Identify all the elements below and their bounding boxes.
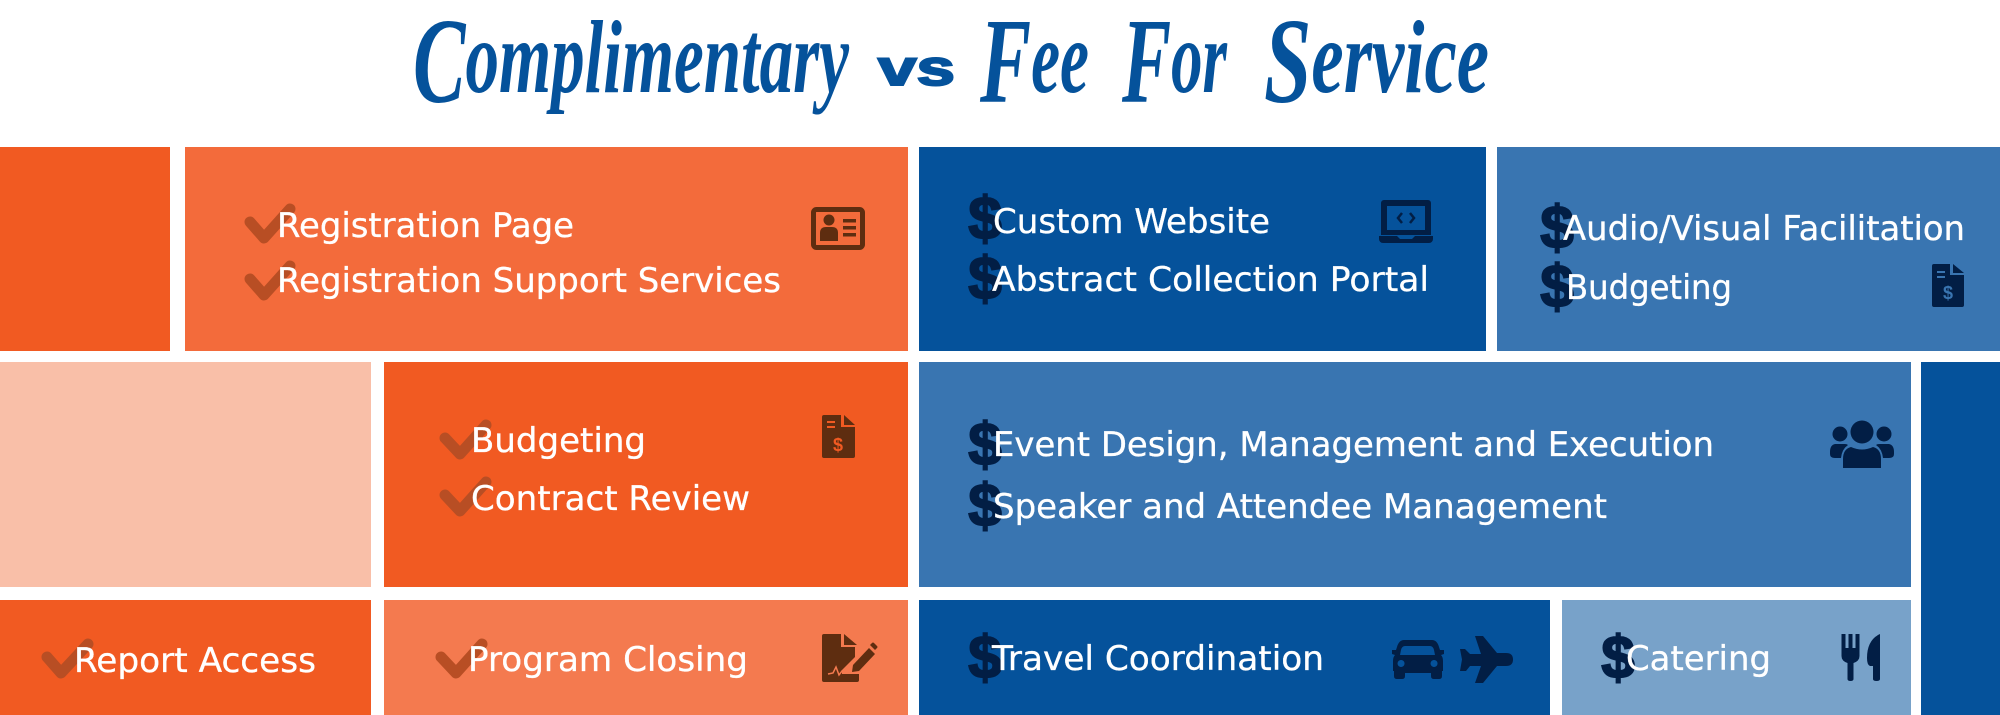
panel: travel coordination (919, 600, 1550, 715)
panel: event design (919, 362, 1911, 587)
text: registration page: Registration Page (277, 206, 574, 245)
icon: plane (1460, 636, 1513, 683)
title (413, 0, 1489, 129)
text: travel coordination: Travel Coordination (991, 639, 1324, 678)
panel: budgeting and contract review (384, 362, 908, 587)
panel: catering (1562, 600, 1911, 715)
icon: id card (814, 210, 862, 248)
text: contract review: Contract Review (471, 479, 750, 518)
icon: fork and knife (1842, 634, 1880, 681)
icon: check registration page (250, 209, 290, 238)
icon: invoice document (822, 415, 855, 458)
icon: dollar budgeting: $ (1540, 253, 1574, 320)
text: report access: Report Access (74, 641, 316, 680)
title: ervice (1311, 0, 1489, 115)
text: registration support services: Registration Support Services (277, 261, 781, 300)
icon: dollar abstract: $ (968, 245, 1002, 312)
panel: audio visual (1497, 147, 2000, 351)
text: speaker and attendee management: Speaker and Attendee Management (993, 487, 1607, 526)
text: custom website: Custom Website (993, 202, 1270, 241)
icon: dollar custom website: $ (968, 185, 1002, 252)
icon: invoice document: $ (1943, 283, 1953, 303)
text: budgeting: Budgeting (471, 421, 646, 460)
text: program closing: Program Closing (468, 640, 748, 679)
icon: check contract review (445, 482, 486, 511)
panel: tall blue block (1921, 362, 2000, 715)
icon: dollar speaker: $ (968, 472, 1002, 539)
text: catering: Catering (1626, 639, 1771, 678)
icon: check report access (47, 644, 88, 673)
icon: car (1392, 640, 1444, 679)
panel: empty pale orange block (0, 362, 371, 587)
icon: people group (1830, 420, 1894, 468)
text: abstract collection portal: Abstract Collection Portal (992, 260, 1429, 299)
icon: laptop code (1379, 200, 1433, 243)
panel: empty orange block (0, 147, 170, 351)
icon: signed document (822, 634, 878, 682)
panel: registration (185, 147, 908, 351)
title: vs (878, 40, 955, 96)
icon: check registration support (250, 266, 290, 295)
text: audio visual facilitation: Audio/Visual Facilitation (1563, 209, 1965, 248)
icon: dollar event design: $ (968, 411, 1002, 478)
panel: program closing (384, 600, 908, 715)
icon: check budgeting (445, 425, 486, 454)
title: or (1171, 0, 1228, 115)
title: ee (1031, 0, 1089, 115)
panel: report access (0, 600, 371, 715)
text: event design: Event Design, Management and Execution (993, 425, 1714, 464)
text: budgeting: Budgeting (1566, 268, 1732, 307)
icon: dollar audio visual: $ (1540, 194, 1574, 261)
icon: check program closing (441, 644, 482, 673)
icon: dollar catering: $ (1601, 624, 1635, 691)
icon: invoice document (1932, 264, 1964, 307)
icon: invoice document: $ (833, 435, 843, 455)
panel: custom website (919, 147, 1486, 351)
icon: dollar travel: $ (968, 624, 1002, 691)
title: omplimentary (465, 0, 850, 115)
